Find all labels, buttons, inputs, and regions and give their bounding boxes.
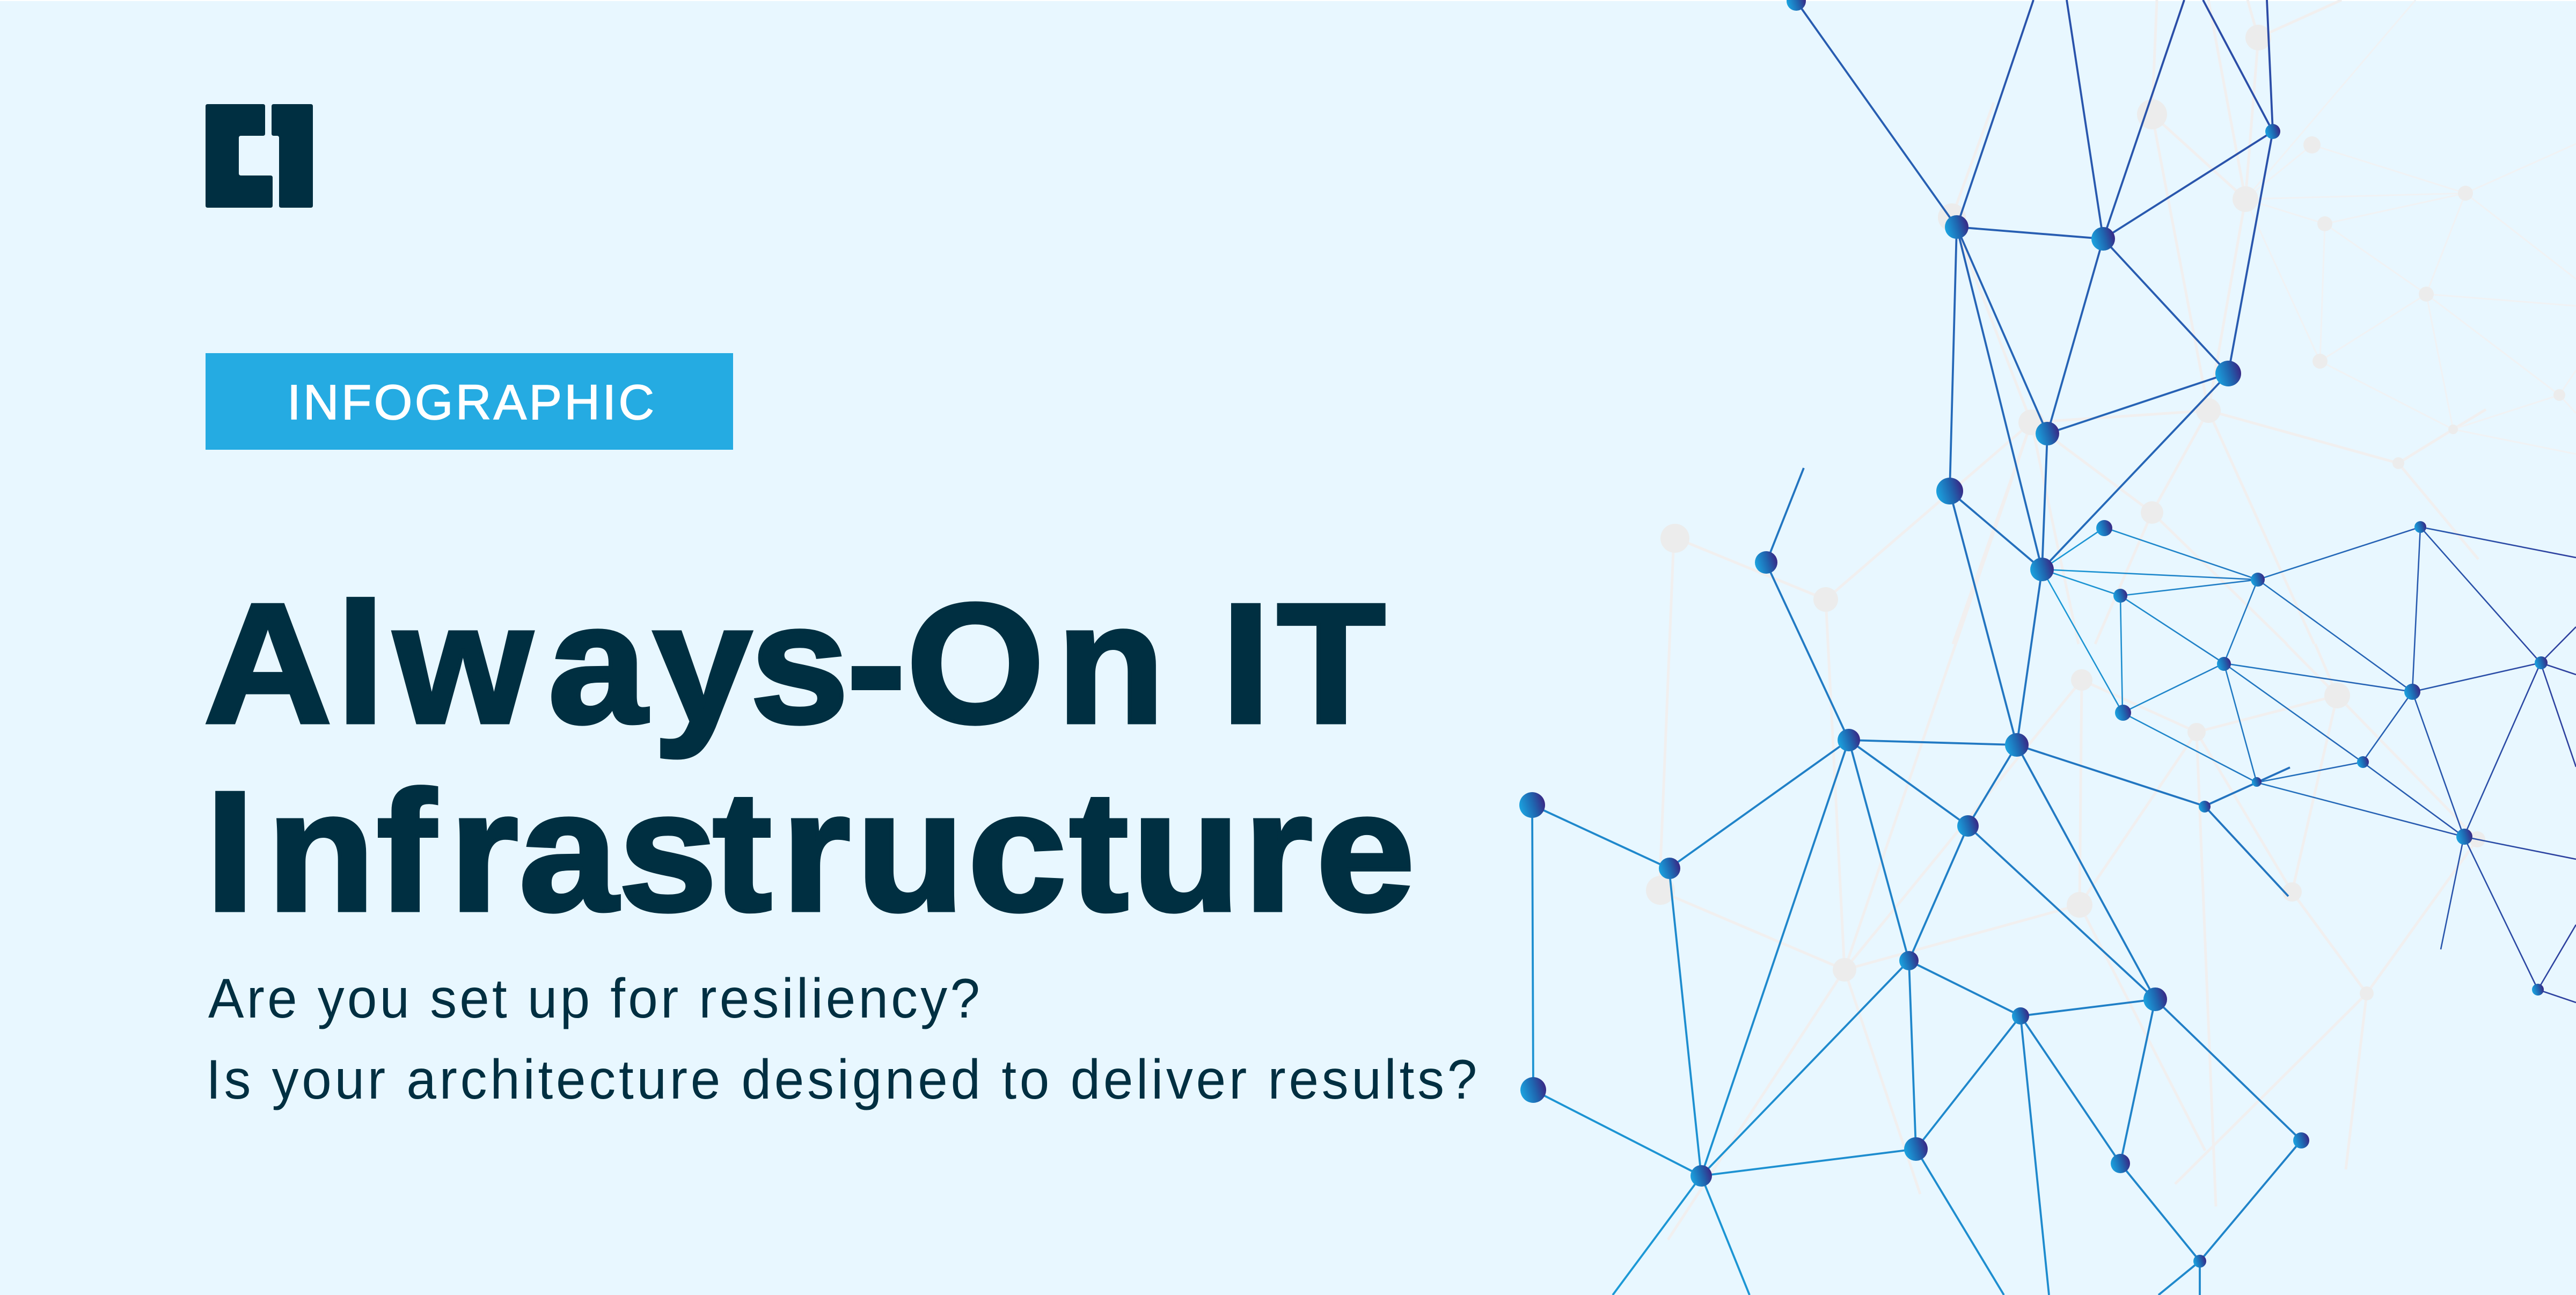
subtitle questions: Are you set up for resiliency? xyxy=(208,967,980,1029)
network nodes xyxy=(1519,0,2548,1268)
subtitle questions xyxy=(206,967,1477,1110)
ghost network: faint background mesh xyxy=(1646,0,2576,1240)
category tag: INFOGRAPHIC xyxy=(206,353,733,450)
category tag: INFOGRAPHIC: INFOGRAPHIC xyxy=(287,375,654,430)
title: Always-On IT xyxy=(204,568,1386,760)
subtitle questions: Is your architecture designed to deliver results? xyxy=(206,1048,1477,1110)
network connections: main mesh lines xyxy=(1532,0,2301,1295)
logo xyxy=(206,104,313,208)
title xyxy=(204,568,1415,947)
title: Infrastructure xyxy=(206,756,1415,947)
network connections: thin upper-right mesh lines xyxy=(2042,527,2576,1003)
